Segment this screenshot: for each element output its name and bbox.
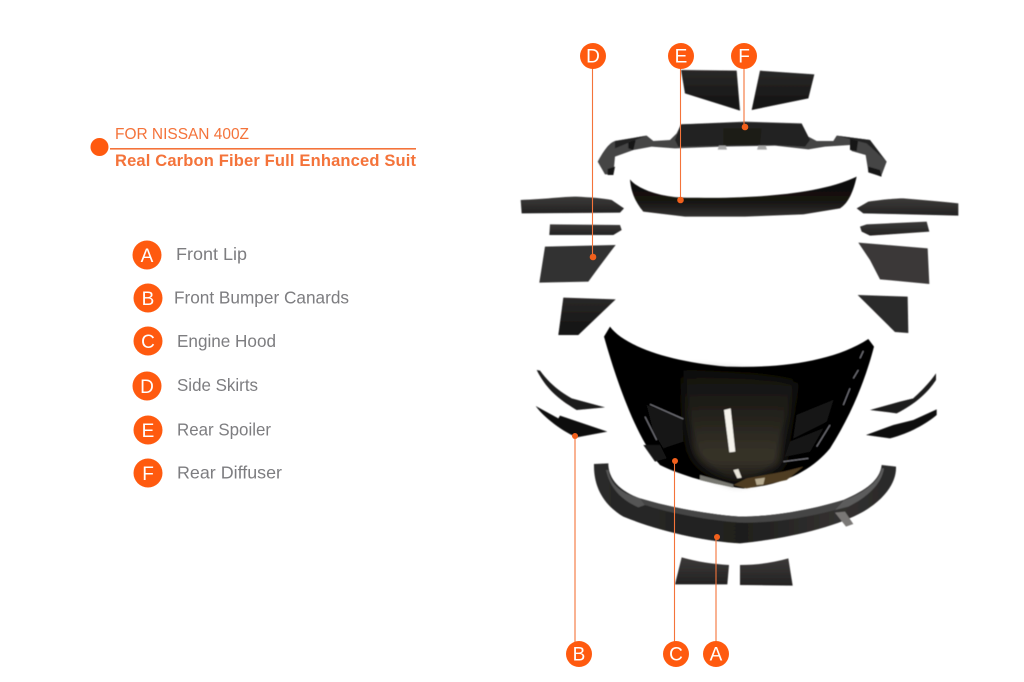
part: left side blade small — [549, 224, 622, 235]
callout F: F — [738, 46, 750, 68]
callout D — [580, 43, 606, 260]
legend item A: A — [141, 246, 154, 267]
part: rear spoiler — [630, 177, 857, 217]
callout C — [663, 458, 689, 667]
part: canard lower left — [536, 406, 607, 437]
legend item C — [134, 326, 276, 356]
legend item B: B — [142, 289, 154, 310]
legend item E: Rear Spoiler — [177, 420, 271, 440]
callout D: D — [586, 46, 600, 68]
legend item C: C — [141, 332, 155, 353]
subtitle: Real Carbon Fiber Full Enhanced Suit — [115, 152, 416, 170]
title bullet — [90, 138, 108, 156]
callout B: B — [573, 644, 585, 666]
legend item E: E — [142, 421, 154, 442]
part: right side panel — [858, 243, 929, 284]
legend item A — [132, 240, 247, 270]
legend item B: Front Bumper Canards — [174, 288, 349, 308]
part: bottom plate left — [675, 557, 729, 584]
title block — [90, 126, 416, 170]
part: left side panel — [539, 245, 616, 283]
part: engine hood — [604, 327, 874, 488]
part: right side blade upper — [857, 198, 958, 216]
part: rear flap left — [681, 70, 740, 111]
upper car parts — [521, 70, 958, 335]
legend item F: Rear Diffuser — [177, 462, 282, 482]
legend item D: Side Skirts — [177, 375, 258, 395]
title rule — [110, 148, 416, 150]
part: canard upper left — [537, 370, 605, 410]
part: canard lower right — [866, 409, 937, 438]
callout E — [668, 43, 694, 203]
title: vehicle: FOR NISSAN 400Z — [115, 126, 249, 143]
legend list — [132, 240, 349, 488]
callout A — [703, 534, 729, 667]
legend item A: Front Lip — [176, 244, 247, 264]
callout E: E — [675, 46, 687, 68]
part: front lip — [594, 463, 896, 543]
part: rear flap right — [752, 71, 814, 110]
part: right side blade small — [860, 222, 929, 236]
part: left side blade upper — [521, 197, 624, 213]
legend item C: Engine Hood — [177, 331, 276, 351]
callout C: C — [669, 644, 683, 666]
callout B — [566, 433, 592, 667]
legend item D: D — [140, 377, 154, 398]
part: left side lower panel — [558, 298, 616, 335]
part: bottom plate right — [740, 558, 793, 586]
legend item D — [132, 372, 258, 400]
part: canard upper right — [870, 373, 936, 413]
legend item F — [134, 458, 282, 488]
callout F — [731, 43, 757, 130]
callout A: A — [710, 644, 723, 666]
legend item E — [134, 416, 271, 444]
legend item B — [134, 284, 349, 312]
lower car parts — [536, 327, 937, 586]
part: rear diffuser — [598, 122, 887, 177]
legend item F: F — [142, 464, 154, 485]
part: right side lower panel — [858, 295, 908, 333]
